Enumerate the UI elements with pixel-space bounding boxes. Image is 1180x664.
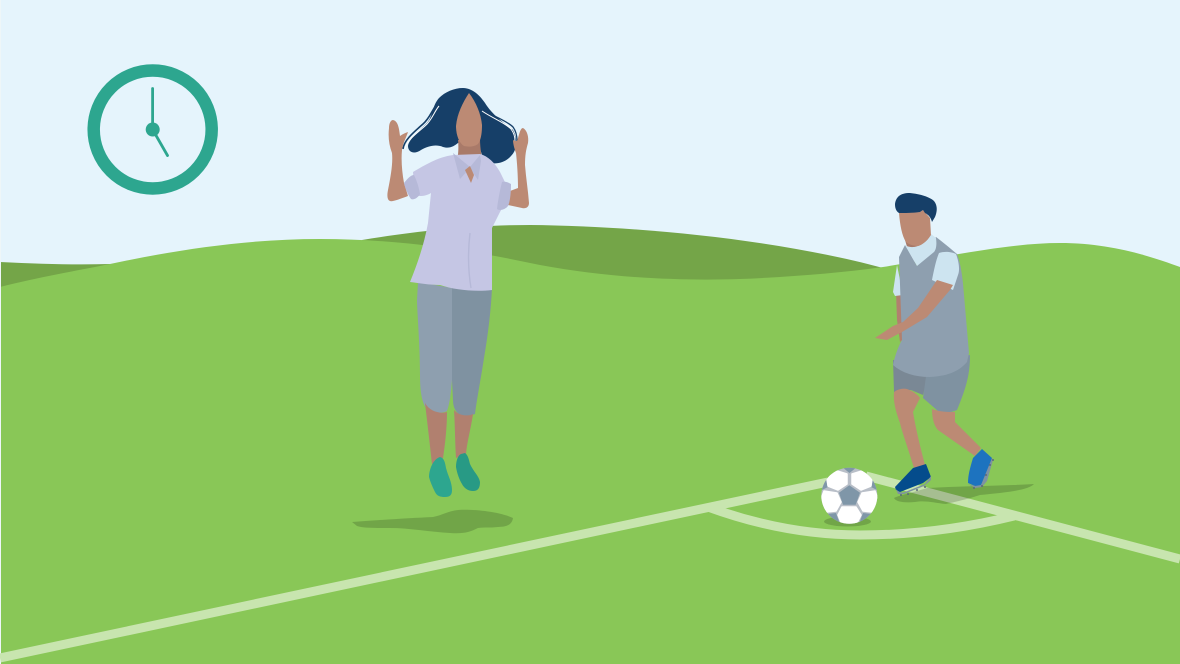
woman figure (387, 88, 529, 497)
soccer ball (819, 467, 880, 526)
man rear arm (896, 291, 905, 342)
woman legs (425, 403, 473, 464)
clock icon (94, 70, 212, 188)
left edge sliver (0, 0, 1, 664)
front meadow (0, 239, 1180, 664)
pitch lines (0, 476, 1180, 658)
woman shoes (429, 453, 480, 497)
sleeve cuffs (404, 175, 420, 199)
man face (899, 210, 931, 246)
man shadow (894, 484, 1034, 504)
ball dark patches (822, 468, 877, 522)
man shorts (893, 355, 970, 412)
back hills (0, 225, 883, 290)
woman shirt (404, 153, 511, 291)
man near sleeve (932, 252, 959, 290)
shirt placket (469, 233, 471, 288)
woman face (456, 93, 482, 147)
man hair (895, 193, 937, 222)
woman shadow (352, 510, 513, 533)
shirt collar (453, 153, 481, 180)
man figure (875, 193, 994, 496)
man neck (905, 233, 932, 262)
ball shadow (824, 516, 871, 526)
man vest (893, 237, 969, 377)
woman arms (387, 120, 529, 208)
ball white patches (819, 470, 880, 525)
woman neck (456, 138, 484, 182)
woman trousers (417, 282, 492, 416)
shirt open neck (465, 166, 474, 183)
man rear sleeve (893, 265, 903, 296)
boot studs (900, 459, 994, 496)
man legs (894, 389, 981, 468)
man near arm (875, 280, 953, 340)
man collar (905, 234, 936, 266)
woman hair (403, 88, 517, 163)
man boots (895, 449, 994, 496)
